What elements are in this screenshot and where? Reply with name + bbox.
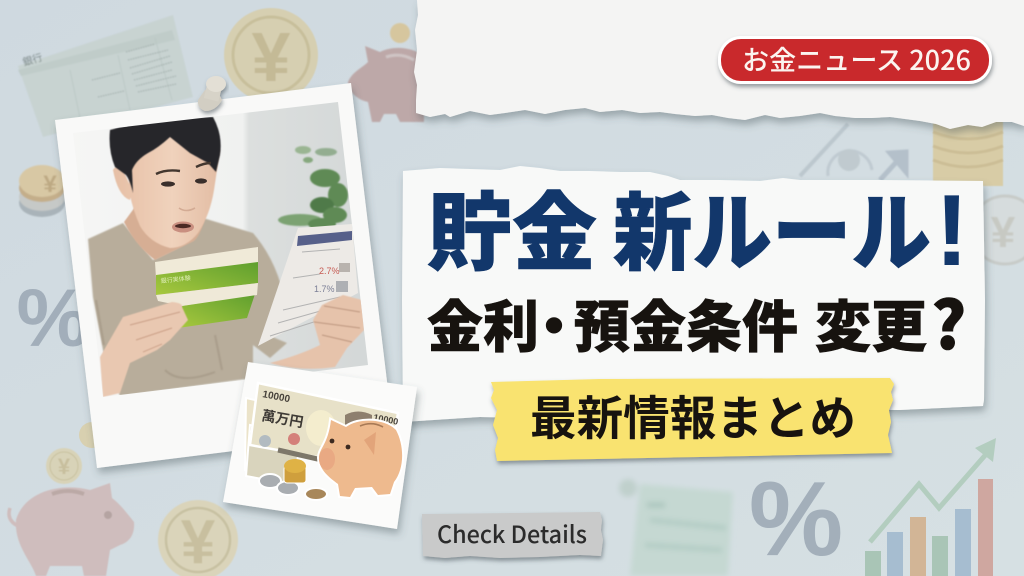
icon: banknotes: 萬万円 — [260, 405, 305, 432]
photo card: money and piggy bank — [223, 362, 417, 529]
icon: piggy bank bottom left — [9, 483, 134, 576]
paper: main title — [402, 166, 985, 422]
icon: percent right: % — [749, 460, 843, 576]
document: 2.7% — [319, 266, 340, 276]
title line 1 — [427, 165, 969, 288]
polaroid frame — [55, 83, 393, 468]
polaroid photo — [55, 83, 393, 468]
icon: coin stack left: ¥ — [43, 171, 57, 198]
icon: banknotes — [245, 383, 399, 485]
neck — [124, 208, 203, 260]
tag text: Check Details — [437, 515, 587, 550]
exclamation mark: ! — [935, 175, 969, 287]
right hand — [270, 295, 364, 369]
plant — [278, 146, 348, 230]
icon: blurred document — [619, 479, 733, 576]
check details tag — [422, 512, 603, 558]
icon: small yen coin: ¥ — [58, 454, 71, 479]
pin — [198, 76, 226, 111]
icon: chart with coin — [800, 124, 906, 180]
photo: man reading passbook — [87, 102, 368, 397]
icon: bank passbook page — [18, 15, 193, 137]
icon: yen coin top — [224, 8, 318, 102]
question mark: ? — [931, 273, 966, 369]
subtitle: 金利 — [427, 283, 539, 364]
yellow tape banner — [491, 378, 894, 461]
icon: banknotes: 10000 — [261, 389, 291, 405]
icon: yen coin top: ¥ — [252, 18, 291, 96]
eyes and brows — [156, 163, 211, 232]
document — [258, 224, 358, 346]
shirt — [88, 218, 287, 396]
title line 1: 貯金 — [427, 165, 597, 288]
icon: yen coin right — [971, 196, 1024, 264]
badge: news 2026 — [718, 36, 992, 84]
hair — [110, 117, 221, 193]
subtitle — [427, 273, 966, 369]
icon: yen coin bottom: ¥ — [181, 508, 216, 576]
icon: yen coin bottom — [158, 500, 238, 576]
icon: gold coin stack — [933, 118, 1003, 186]
left hand — [100, 302, 188, 397]
subtitle change: 変更 — [815, 283, 927, 364]
passbook — [155, 247, 258, 306]
subtitle conditions: 預金条件 — [574, 283, 798, 364]
icon: percent left: % — [17, 273, 89, 364]
icon: bank passbook page: 銀行 — [20, 49, 44, 69]
title words: 新ルール — [613, 165, 931, 288]
chart: rising bars and arrow — [865, 438, 996, 576]
shirt folds — [96, 300, 222, 378]
banner text: 最新情報まとめ — [530, 380, 856, 449]
document: 1.7% — [314, 284, 335, 294]
passbook back page — [178, 294, 255, 328]
icon: coins — [259, 459, 327, 500]
dot separator: ・ — [526, 283, 582, 364]
badge text: お金ニュース 2026 — [742, 39, 971, 78]
icon: coin stack left — [19, 165, 65, 217]
icon: small yen coin — [46, 448, 82, 484]
torn paper top — [414, 0, 1024, 129]
icon: yen coin right: ¥ — [991, 208, 1016, 257]
face — [113, 135, 220, 248]
icon: piggy bank top right — [348, 23, 424, 122]
icon: piggy bank — [319, 420, 402, 497]
passbook: 銀行実体験 — [160, 273, 191, 285]
icon: banknotes: 10000 — [373, 412, 399, 427]
icon: partial yen coin — [79, 422, 105, 448]
